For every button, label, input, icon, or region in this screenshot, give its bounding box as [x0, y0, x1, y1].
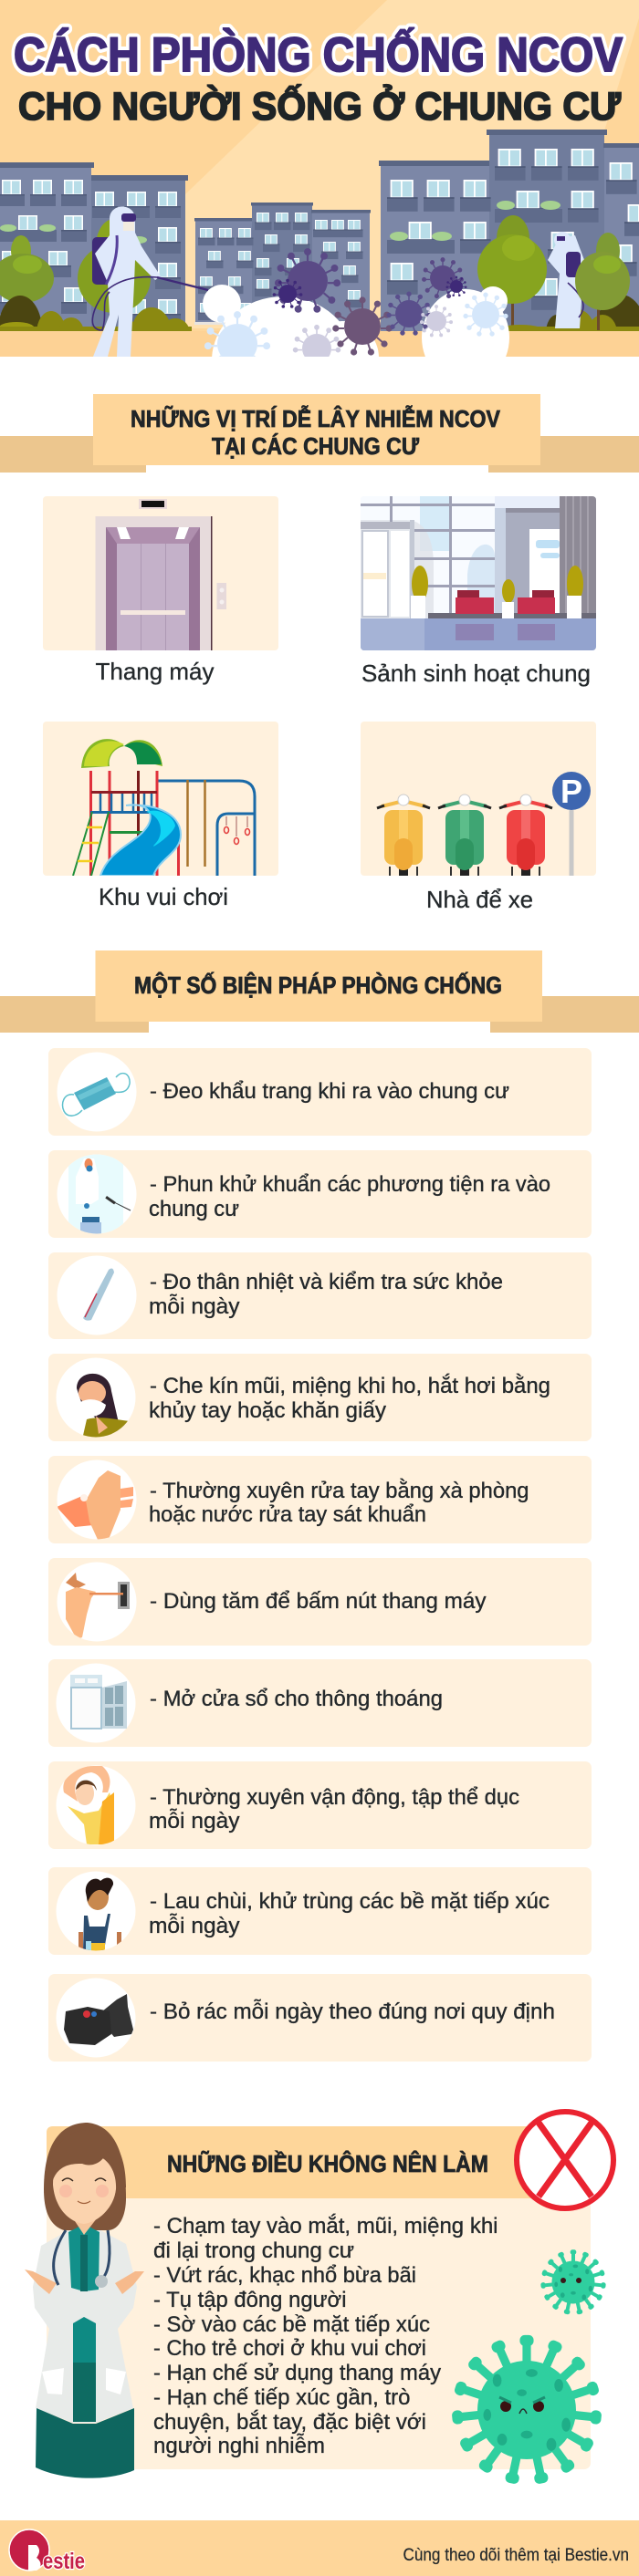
text: disinfect vehicles: chung cư: [149, 1197, 239, 1221]
lower dress panel: [73, 2317, 96, 2422]
card: open windows: [48, 1659, 592, 1747]
list: things to avoid: - Hạn chế tiếp xúc gần, trò: [153, 2385, 411, 2410]
panel: playground tile: [43, 722, 278, 876]
text: clean surfaces: [149, 1889, 550, 1938]
list: things to avoid: [153, 2214, 498, 2458]
hair: [44, 2123, 126, 2230]
list: things to avoid: - Cho trẻ chơi ở khu vui chơi: [153, 2336, 426, 2361]
icon: coughing woman: [77, 1374, 130, 1441]
section heading: infection locations: [0, 394, 639, 473]
panel: parking tile: [361, 722, 596, 876]
text: check temperature: mỗi ngày: [149, 1294, 239, 1319]
coat: [33, 2230, 137, 2423]
shirt: [68, 2224, 100, 2291]
list: things to avoid: - Vứt rác, khạc nhổ bừa bãi: [153, 2263, 416, 2288]
section heading: infection locations: NHỮNG VỊ TRÍ DỄ LÂY NHIỄM NCOV: [131, 405, 501, 432]
card: disinfect vehicles: [48, 1150, 592, 1238]
icon: face mask: [62, 1074, 130, 1116]
icon: washing hands: [57, 1470, 133, 1542]
illustration: left sprayer person: [92, 206, 208, 357]
icon: thermometer: [83, 1269, 114, 1321]
coat pockets: [42, 2368, 126, 2394]
label: parking: Nhà để xe: [426, 886, 533, 913]
text: wash hands: [149, 1479, 529, 1527]
text: wash hands: hoặc nước rửa tay sát khuẩn: [149, 1502, 426, 1527]
logo: Bestie: [9, 2529, 85, 2574]
panel: hero banner: [0, 0, 639, 357]
icon: scooters and parking sign: [377, 772, 591, 876]
text: check temperature: [149, 1270, 503, 1319]
text: open windows: - Mở cửa sổ cho thông thoáng: [150, 1687, 443, 1711]
icon: lobby interior: [361, 496, 596, 650]
list: things to avoid: - Sờ vào các bề mặt tiếp xúc: [153, 2312, 430, 2337]
list: things to avoid: chuyện, bắt tay, đặc biệt với: [153, 2410, 426, 2435]
panel: elevator tile: [43, 496, 278, 650]
icon: trash bags: [64, 1994, 133, 2045]
icon: exercising man: [63, 1766, 114, 1844]
icon: scooters and parking sign: P: [560, 773, 582, 810]
icon: disinfection worker: [68, 1154, 131, 1237]
card: clean surfaces: [48, 1867, 592, 1955]
heading: things to avoid: NHỮNG ĐIỀU KHÔNG NÊN LÀM: [167, 2150, 488, 2177]
illustration: left apartment buildings: [0, 162, 188, 330]
label: playground: Khu vui chơi: [99, 883, 228, 910]
neck: [73, 2218, 97, 2235]
list: things to avoid: người nghi nhiễm: [153, 2434, 325, 2458]
icon: hand pressing button with toothpick: [66, 1573, 130, 1639]
illustration: centre apartment block: [194, 203, 371, 325]
illustration: right foreground tree: [575, 233, 630, 330]
text: check temperature: - Đo thân nhiệt và kiểm tra sức khỏe: [150, 1270, 503, 1294]
card: dispose trash: [48, 1974, 592, 2062]
text: disinfect vehicles: [149, 1172, 550, 1221]
section heading: prevention measures: MỘT SỐ BIỆN PHÁP PHÒNG CHỐNG: [134, 971, 502, 999]
text: cover coughs: khủy tay hoặc khăn giấy: [149, 1398, 386, 1423]
icon: open window: [70, 1675, 127, 1729]
illustration: right sprayer person: [548, 232, 584, 328]
section heading: infection locations: TẠI CÁC CHUNG CƯ: [212, 432, 419, 460]
card: wash hands: [48, 1456, 592, 1543]
logo: Bestie: estie: [43, 2549, 85, 2574]
hands: [25, 2270, 144, 2294]
face: [53, 2153, 116, 2224]
section heading: prevention measures: [0, 950, 639, 1033]
card: wear a mask: [48, 1048, 592, 1136]
text: wash hands: - Thường xuyên rửa tay bằng xà phòng: [150, 1479, 529, 1503]
list: things to avoid: - Hạn chế sử dụng thang máy: [153, 2361, 442, 2385]
text: exercise: mỗi ngày: [149, 1809, 239, 1833]
illustration: doctor: [25, 2123, 144, 2478]
text: toothpick: - Dùng tăm để bấm nút thang máy: [150, 1589, 486, 1614]
title: [14, 27, 623, 129]
text: exercise: [149, 1785, 519, 1833]
list: things to avoid: - Chạm tay vào mắt, mũi, miệng khi: [153, 2214, 498, 2238]
panel: things to avoid: [47, 2126, 591, 2469]
label: elevator: Thang máy: [95, 658, 214, 685]
icon: elevator: [95, 499, 226, 650]
title: CHO NGƯỜI SỐNG Ở CHUNG CƯ: [18, 84, 621, 129]
icon: prohibition sign: [517, 2112, 613, 2208]
illustration: right apartment buildings: [379, 130, 639, 331]
text: cover coughs: [149, 1374, 550, 1423]
label: lobby: Sảnh sinh hoạt chung: [361, 660, 591, 687]
text: wear a mask: - Đeo khẩu trang khi ra vào chung cư: [150, 1079, 509, 1104]
text: clean surfaces: mỗi ngày: [149, 1914, 239, 1938]
ground: [0, 331, 639, 357]
icon: large angry virus: [452, 2335, 602, 2485]
text: disinfect vehicles: - Phun khử khuẩn các phương tiện ra vào: [150, 1172, 550, 1197]
icon: cleaner: [79, 1878, 121, 1951]
text: cover coughs: - Che kín mũi, miệng khi ho, hắt hơi bằng: [150, 1374, 550, 1398]
card: toothpick: [48, 1558, 592, 1646]
text: exercise: - Thường xuyên vận động, tập thể dục: [150, 1785, 519, 1810]
panel: lobby tile: [361, 496, 596, 650]
card: check temperature: [48, 1252, 592, 1339]
illustration: trees: [0, 215, 547, 330]
card: cover coughs: [48, 1354, 592, 1441]
list: things to avoid: đi lại trong chung cư: [153, 2238, 354, 2263]
card: exercise: [48, 1761, 592, 1849]
footer: [0, 2520, 639, 2576]
stethoscope: [54, 2230, 110, 2285]
list: things to avoid: - Tụ tập đông người: [153, 2288, 347, 2312]
icon: small angry virus: [540, 2249, 606, 2315]
skirt: [36, 2408, 134, 2478]
illustration: bushes: [0, 296, 639, 331]
illustration: white disinfectant clouds: [203, 285, 509, 357]
illustration: virus particles: [204, 248, 508, 357]
text: clean surfaces: - Lau chùi, khử trùng các bề mặt tiếp xúc: [150, 1889, 550, 1914]
text: dispose trash: - Bỏ rác mỗi ngày theo đúng nơi quy định: [150, 2000, 555, 2024]
icon: playground: [73, 739, 255, 876]
